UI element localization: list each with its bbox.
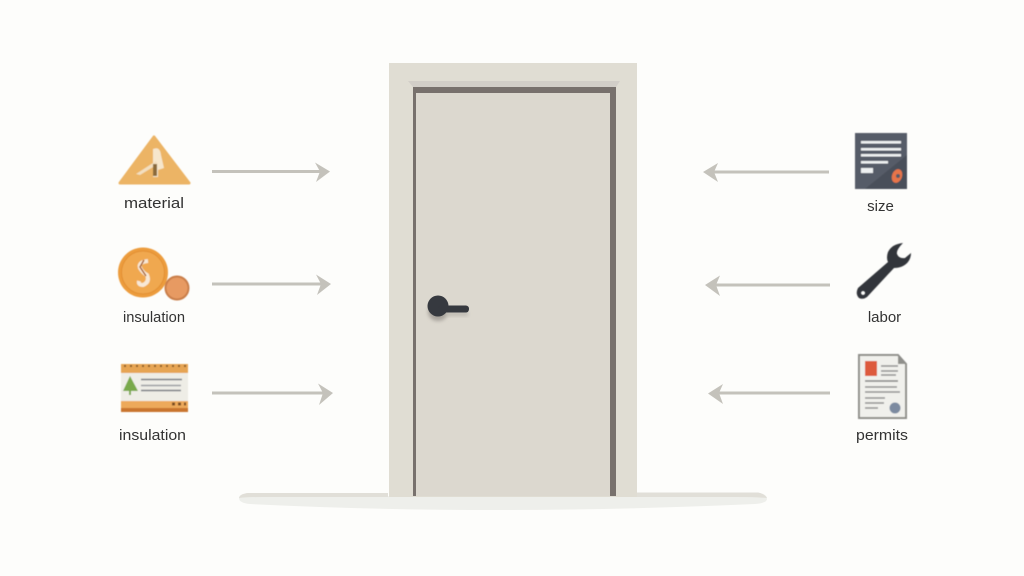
arrow (703, 163, 829, 182)
left item: insulation coin (118, 248, 188, 326)
arrow (705, 276, 830, 296)
right item: permits (856, 355, 908, 444)
right item: labor (857, 243, 911, 326)
label: insulation (119, 427, 186, 444)
floor slab (239, 492, 767, 510)
icon: warning triangle (120, 137, 189, 183)
left item: insulation card (119, 364, 188, 444)
door frame (389, 63, 637, 497)
arrow (708, 384, 830, 404)
label: size (867, 198, 894, 215)
arrow (212, 162, 330, 182)
arrow (212, 384, 333, 405)
label: insulation (123, 309, 185, 326)
icon: card (121, 364, 188, 412)
frame lintel shadow (408, 81, 620, 87)
door handle (428, 296, 469, 321)
icon: dark document (855, 133, 907, 189)
icon: coins (118, 248, 188, 300)
right item: size (855, 133, 907, 215)
arrow (212, 274, 331, 295)
door recess (413, 87, 617, 496)
label: material (124, 195, 184, 212)
label: labor (868, 309, 901, 326)
door leaf (416, 93, 610, 496)
icon: wrench (857, 243, 911, 299)
left item: material (120, 137, 189, 212)
icon: permit document (859, 355, 906, 418)
label: permits (856, 427, 908, 444)
right jamb (616, 87, 637, 497)
door assembly (389, 63, 637, 497)
